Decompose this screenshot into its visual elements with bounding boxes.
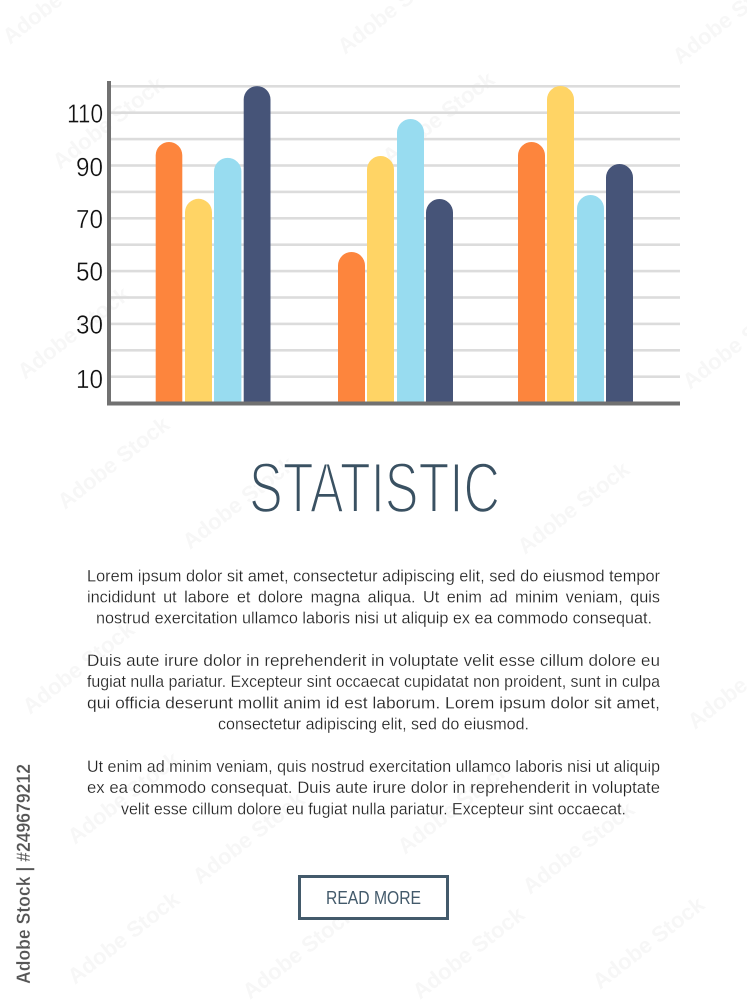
text block: paragraph 3: [87, 758, 660, 818]
text: Adobe Stock: [393, 756, 515, 859]
read more button: [300, 876, 448, 918]
text block: paragraph 2: Duis aute irure dolor in reprehenderit in voluptate velit esse cillum dolore eu: [87, 652, 660, 670]
text block: paragraph 1: incididunt ut labore et dolore magna aliqua. Ut enim ad minim veniam, quis: [87, 588, 660, 606]
text: Adobe Stock: [188, 786, 310, 889]
text: Adobe Stock: [378, 66, 500, 169]
title: STATISTIC: [249, 450, 500, 528]
y-axis labels: 90: [76, 152, 103, 182]
text block: paragraph 2: qui officia deserunt mollit anim id est laborum. Lorem ipsum dolor sit amet,: [87, 694, 660, 712]
text block: paragraph 1: [87, 568, 660, 628]
watermark id text: Adobe Stock | #249679212: [14, 764, 35, 984]
text: Adobe Stock: [63, 886, 185, 989]
text: Adobe Stock: [513, 456, 635, 559]
text block: paragraph 1: Lorem ipsum dolor sit amet, consectetur adipiscing elit, sed do eiusmod tempor: [87, 568, 660, 586]
y-axis labels: 10: [76, 364, 103, 394]
bar group 3: [518, 86, 633, 402]
y-axis labels: 30: [76, 310, 103, 340]
y-axis labels: 70: [76, 204, 103, 234]
text: Adobe Stock: [13, 281, 135, 384]
text block: paragraph 1: nostrud exercitation ullamco laboris nisi ut aliquip ex ea commodo consequat.: [96, 610, 652, 628]
bar group 2: [338, 119, 453, 402]
text: Adobe Stock: [48, 71, 170, 174]
text block: paragraph 3: ex ea commodo consequat. Duis aute irure dolor in reprehenderit in voluptate: [87, 779, 660, 797]
text block: paragraph 2: fugiat nulla pariatur. Excepteur sint occaecat cupidatat non proident, sunt in culpa: [87, 673, 661, 691]
text: Adobe Stock: [588, 891, 710, 994]
text: Adobe Stock: [518, 796, 640, 899]
text: Adobe Stock: [178, 451, 300, 554]
text block: paragraph 3: velit esse cillum dolore eu fugiat nulla pariatur. Excepteur sint occaecat.: [121, 800, 626, 818]
y-axis labels: 110: [67, 98, 103, 128]
chart axes: [109, 81, 680, 404]
text block: paragraph 2: [87, 652, 661, 734]
bar group 1: [156, 86, 270, 402]
bar chart: [67, 81, 680, 404]
text: Adobe Stock: [18, 616, 140, 719]
text block: paragraph 2: consectetur adipiscing elit, sed do eiusmod.: [218, 716, 529, 734]
y-axis labels: 50: [76, 256, 103, 286]
text: Adobe Stock: [53, 411, 175, 514]
text: Adobe Stock: [63, 746, 185, 849]
text block: paragraph 3: Ut enim ad minim veniam, quis nostrud exercitation ullamco laboris nisi ut aliquip: [87, 758, 660, 776]
y-axis labels: [67, 98, 103, 394]
read more button: READ MORE: [326, 888, 421, 908]
